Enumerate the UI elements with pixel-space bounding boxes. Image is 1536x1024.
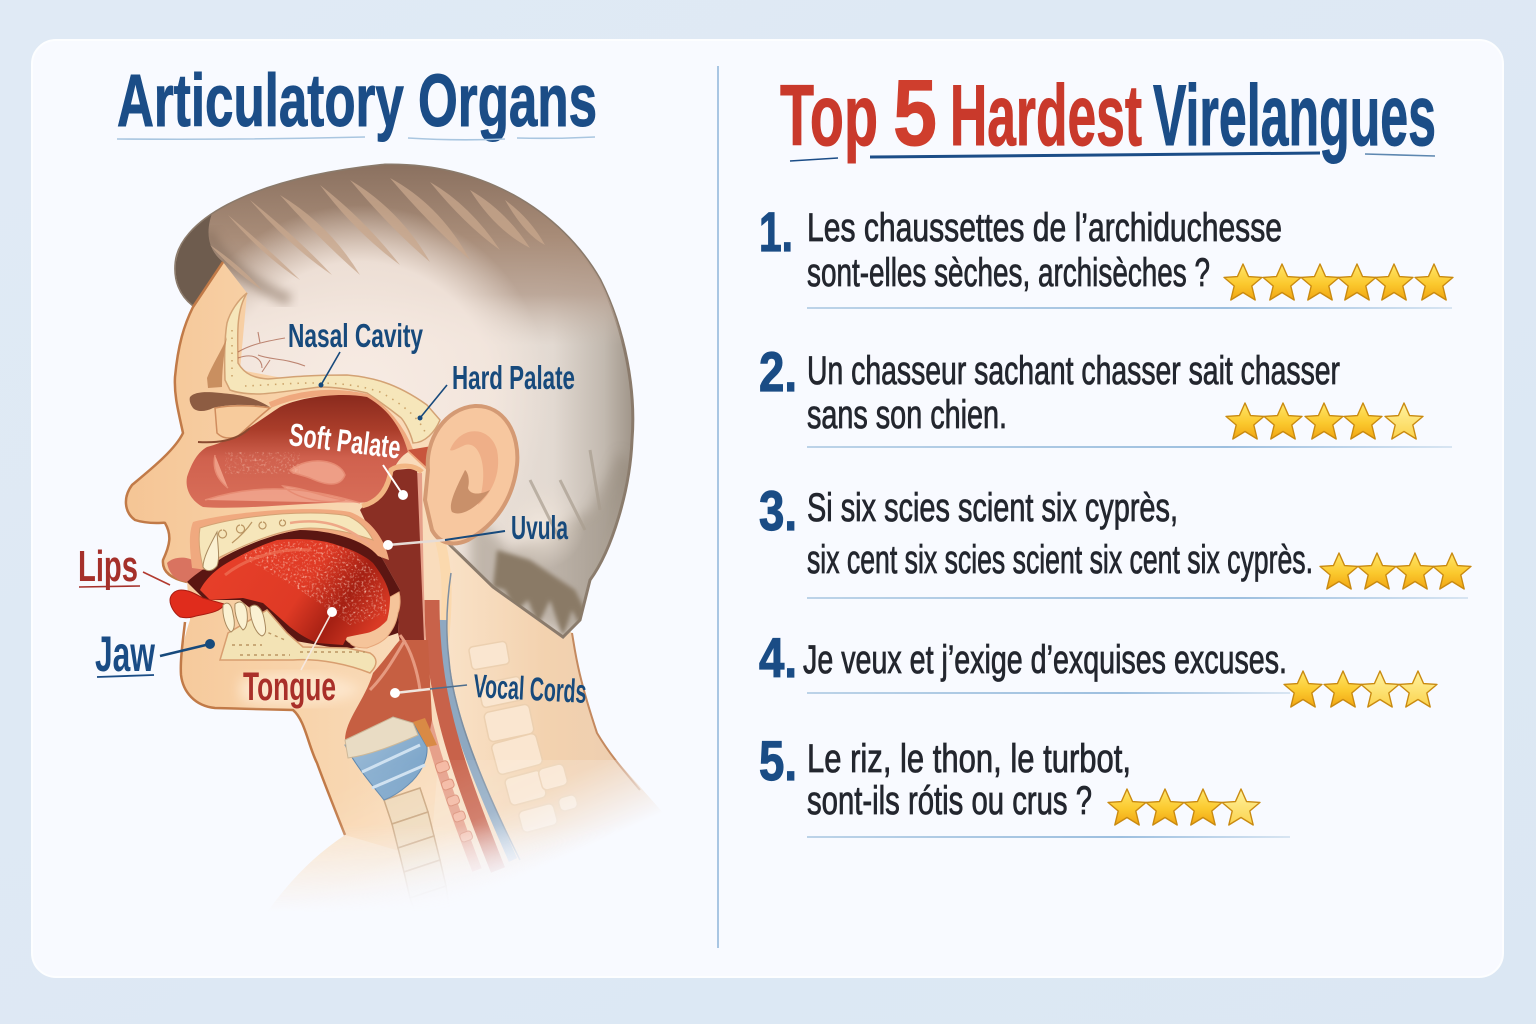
label: Nasal Cavity: Nasal Cavity <box>288 317 423 354</box>
item 2: Un chasseur sachant chasser sait chasser <box>807 349 1340 393</box>
item 3: 3. <box>759 479 797 542</box>
item 5 <box>759 729 1290 838</box>
item 5: 5. <box>759 729 797 792</box>
ear <box>425 406 517 543</box>
item 5: sont-ils rótis ou crus ? <box>807 779 1092 823</box>
hair strands <box>210 178 545 290</box>
item 3 <box>759 479 1471 599</box>
eyelid <box>215 406 270 438</box>
item 2: 2. <box>759 340 797 403</box>
label: Uvula: Uvula <box>511 509 568 546</box>
label: Tongue <box>243 607 337 709</box>
face outline <box>126 262 345 835</box>
stars: 4 <box>1284 671 1437 707</box>
item 4: 4. <box>759 626 797 689</box>
soft palate nasal mass <box>187 395 408 508</box>
stars: 5 <box>1226 403 1423 439</box>
label: Jaw: Jaw <box>95 626 155 682</box>
soft palate arch <box>362 466 422 506</box>
small pink ring squares <box>435 760 473 843</box>
face skin <box>126 262 450 860</box>
lower jaw bone <box>220 610 376 673</box>
spine and airway stripes <box>417 473 520 870</box>
chin and tongue-base glow <box>240 673 362 705</box>
oral cavity <box>187 528 400 650</box>
title: Top 5 Hardest Virelangues: Top <box>780 68 878 164</box>
neck back edge <box>572 633 640 790</box>
blood vessels <box>238 332 305 372</box>
item 3: Si six scies scient six cyprès, <box>807 486 1178 530</box>
cream stripe beside pharynx <box>440 540 447 640</box>
bone stipple <box>232 330 425 432</box>
label: Soft Palate: Soft Palate <box>287 416 403 466</box>
label: Soft Palate <box>287 416 408 500</box>
item 1 <box>759 200 1453 309</box>
item 1: 1. <box>759 200 793 263</box>
throat <box>360 468 424 640</box>
label: Uvula <box>383 509 568 550</box>
title: Top 5 Hardest Virelangues <box>780 60 1436 165</box>
eye crease <box>198 428 250 442</box>
stars: 6 <box>1224 264 1453 300</box>
label: Hard Palate <box>418 359 575 420</box>
lower pharynx <box>345 640 432 745</box>
hard palate bone <box>190 509 389 570</box>
upper tooth <box>203 532 219 571</box>
stars: 4 <box>1320 553 1471 589</box>
tongue <box>200 536 390 645</box>
lower teeth <box>223 602 266 636</box>
eyebrow <box>190 392 270 411</box>
cavity upper rim <box>270 393 433 472</box>
item 2: sans son chien. <box>807 393 1007 437</box>
divider <box>717 66 719 948</box>
illustration: head cross-section <box>78 160 665 915</box>
stars: 4 <box>1108 789 1260 825</box>
label: Vocal Cords: Vocal Cords <box>473 667 587 710</box>
larynx cartilage <box>345 717 437 800</box>
neck and shoulder <box>280 544 656 897</box>
item 5: Le riz, le thon, le turbot, <box>807 737 1131 781</box>
title: Articulatory Organs: Articulatory Organs <box>117 59 597 142</box>
title: Top 5 Hardest Virelangues: 5 <box>893 60 937 165</box>
throat hook <box>346 592 400 648</box>
label: Lips: Lips <box>78 542 138 591</box>
item 1: sont-elles sèches, archisèches ? <box>807 251 1210 295</box>
hair front shadow <box>207 232 290 300</box>
item 4 <box>759 626 1437 707</box>
upper lip pink <box>167 558 203 582</box>
item 1: Les chaussettes de l’archiduchesse <box>807 206 1282 250</box>
epiglottis lines <box>370 635 420 690</box>
label: Nasal Cavity <box>288 317 423 388</box>
vertebrae <box>468 641 579 833</box>
label: Hard Palate: Hard Palate <box>452 359 575 396</box>
hair and scalp <box>170 160 640 640</box>
trachea rings <box>383 787 446 888</box>
nasal highlights <box>205 452 360 503</box>
title: Top 5 Hardest Virelangues: Hardest <box>950 68 1142 164</box>
forehead brown wedge <box>207 337 227 388</box>
label: Vocal Cords <box>390 667 587 710</box>
skull bone with nasal strip <box>225 293 440 443</box>
neck hair spikes <box>493 550 585 637</box>
item 2 <box>759 340 1452 448</box>
label: Tongue: Tongue <box>243 665 336 709</box>
lower lip <box>170 590 224 618</box>
item 4: Je veux et j’exige d’exquises excuses. <box>803 638 1287 682</box>
red wedge near ear <box>408 446 428 466</box>
